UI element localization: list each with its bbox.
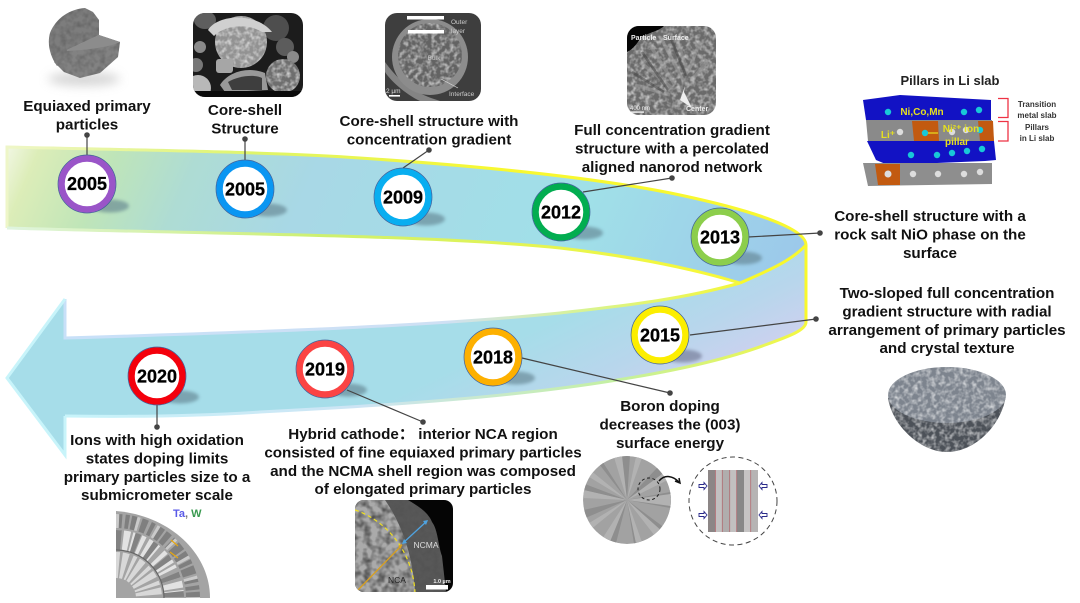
crystal: yellow labels: pillar <box>945 137 969 148</box>
label: full concentration gradient: structure with a percolated <box>575 140 769 157</box>
ribbon: lower band bottom edge <box>65 322 806 416</box>
crystal: bottom grey slab <box>863 163 992 186</box>
crystal: upper blue slab <box>863 95 991 120</box>
milestone 2005 equiaxed <box>58 132 129 213</box>
milestone 2009: 2009 <box>383 188 423 208</box>
dopant label: Ta, W <box>173 508 202 520</box>
large dashed circle <box>689 457 777 545</box>
curved arrow <box>659 477 680 483</box>
label: core-shell structure: Core-shell <box>208 102 282 119</box>
image: concentration gradient particle <box>385 13 481 101</box>
image: core-shell SEM <box>193 13 303 97</box>
quarter fan base <box>116 511 210 598</box>
milestone 2019: 2019 <box>305 360 345 380</box>
image: two-sloped hemisphere <box>888 367 1006 452</box>
image: equiaxed particle <box>48 8 120 86</box>
ribbon: right vertical edge <box>804 245 808 322</box>
crystal: yellow labels: Li⁺ <box>881 130 895 141</box>
ribbon: upper band <box>7 147 806 283</box>
milestone 2005 core-shell: 2005 <box>225 180 265 200</box>
crystal: cyan atoms <box>885 107 985 158</box>
disk wedges <box>583 456 671 544</box>
label: high oxidation ions: Ions with high oxidation <box>70 432 244 449</box>
image: nanorod network: Surface <box>663 35 689 42</box>
milestone 2013: 2013 <box>700 228 740 248</box>
quarter fan middle rods <box>116 540 174 598</box>
quarter fan inner rods <box>116 565 149 598</box>
label: boron doping: decreases the (003) <box>600 416 740 433</box>
label: equiaxed primary particles: particles <box>56 116 118 133</box>
milestone 2020 <box>128 347 199 430</box>
milestone 2009 <box>374 147 445 226</box>
label: two-sloped gradient: gradient structure with radial <box>842 303 1052 320</box>
label: core-shell with concentration gradient: Core-shell structure with <box>340 113 518 130</box>
milestone 2020: 2020 <box>137 366 177 386</box>
image: concentration gradient particle: Outer <box>451 19 468 26</box>
label: high oxidation ions: submicrometer scale <box>81 487 233 504</box>
label: hybrid cathode: Hybrid cathode： interior NCA region <box>288 426 558 443</box>
image: nanorod network <box>627 26 716 115</box>
crystal title: Pillars in Li slab <box>901 73 1000 88</box>
crystal: slab labels: in Li slab <box>1020 134 1054 143</box>
milestone 2018 <box>464 328 673 396</box>
image: pillars in Li slab crystal <box>863 73 1057 186</box>
label: core-shell structure: Structure <box>211 120 279 137</box>
image: nanorod network: 400 nm <box>630 106 650 112</box>
quarter fan boundary <box>116 550 164 598</box>
label: full concentration gradient: aligned nanorod network <box>582 159 763 176</box>
quarter fan outer highlights <box>116 521 193 598</box>
quarter fan middle dark rods <box>116 540 174 598</box>
crystal: white atoms <box>884 127 983 178</box>
image: quarter section with Ta W doping <box>116 508 210 598</box>
rods <box>708 470 758 532</box>
quarter fan outer rods <box>116 521 193 598</box>
crystal: lithium slab <box>866 120 994 141</box>
label: rock salt NiO: Core-shell structure with a <box>834 208 1026 225</box>
crystal: yellow labels: Ni,Co,Mn <box>900 107 944 118</box>
crystal: orange pillars <box>912 121 994 141</box>
milestone 2015 <box>631 306 819 364</box>
image: hybrid NCA NCMA section: NCA <box>388 575 406 585</box>
ribbon: upper band top edge <box>7 147 806 245</box>
label: full concentration gradient: Full concentration gradient <box>574 122 770 139</box>
milestone 2012 <box>532 175 675 241</box>
crystal: yellow labels <box>881 107 979 148</box>
crystal: slab labels: Pillars <box>1025 123 1050 132</box>
image: hybrid NCA NCMA section <box>355 500 453 592</box>
image: concentration gradient particle: Bulk <box>428 55 441 62</box>
milestone 2005 core-shell <box>216 136 287 218</box>
crystal: slab labels: metal slab <box>1017 111 1057 120</box>
label: two-sloped gradient: and crystal texture <box>879 340 1015 357</box>
ribbon: arrow head edge <box>7 299 65 455</box>
ribbon: lower arrow band <box>7 245 806 455</box>
image: concentration gradient particle: Interface <box>449 91 475 98</box>
label: rock salt NiO: rock salt NiO phase on the <box>834 226 1026 243</box>
milestone 2013 <box>691 208 823 266</box>
milestone 2018: 2018 <box>473 348 513 368</box>
image: hybrid NCA NCMA section: 1.0 µm <box>433 579 451 585</box>
dopant arrows <box>170 540 178 558</box>
crystal: slab labels: Transition <box>1018 100 1056 109</box>
milestone 2012: 2012 <box>541 202 581 222</box>
label: boron doping: Boron doping <box>620 398 720 415</box>
ribbon: fold edge <box>740 245 806 283</box>
image: concentration gradient particle: 2 µm <box>386 88 401 95</box>
label: hybrid cathode: consisted of fine equiaxed primary particles <box>264 444 582 461</box>
label: boron doping: surface energy <box>616 435 725 452</box>
label: two-sloped gradient: arrangement of primary particles <box>828 322 1066 339</box>
label: core-shell with concentration gradient: concentration gradient <box>347 131 511 148</box>
label: equiaxed primary particles: Equiaxed primary <box>23 98 151 115</box>
label: hybrid cathode: and the NCMA shell region was composed <box>270 463 576 480</box>
milestone 2019 <box>296 340 426 425</box>
timeline ribbon arrow <box>7 147 806 455</box>
label: two-sloped gradient: Two-sloped full concentration <box>840 285 1054 302</box>
image: hybrid NCA NCMA section: NCMA <box>413 540 439 550</box>
crystal: red brackets <box>998 98 1008 141</box>
image: nanorod network: Particle <box>631 35 656 42</box>
label: hybrid cathode: of elongated primary particles <box>315 481 531 498</box>
milestone 2005 equiaxed: 2005 <box>67 174 107 194</box>
small dashed selection circle <box>638 478 660 500</box>
milestone 2015: 2015 <box>640 326 680 346</box>
label: high oxidation ions: primary particles size to a <box>64 469 251 486</box>
crystal: lower blue slab <box>867 141 996 165</box>
ribbon: upper band bottom edge <box>7 228 740 283</box>
image: boron doped disk <box>583 456 777 545</box>
ribbon: lower band top edge <box>65 283 740 338</box>
image: nanorod network: Center <box>686 106 708 113</box>
image: concentration gradient particle: layer <box>451 28 466 35</box>
compression arrows <box>699 482 767 518</box>
crystal: slab labels <box>1017 100 1057 143</box>
crystal: yellow labels: Ni²⁺ ion <box>943 124 979 135</box>
crystal: bottom orange pillar <box>875 164 900 185</box>
label: high oxidation ions: states doping limits <box>86 450 228 467</box>
label: rock salt NiO: surface <box>903 245 957 262</box>
